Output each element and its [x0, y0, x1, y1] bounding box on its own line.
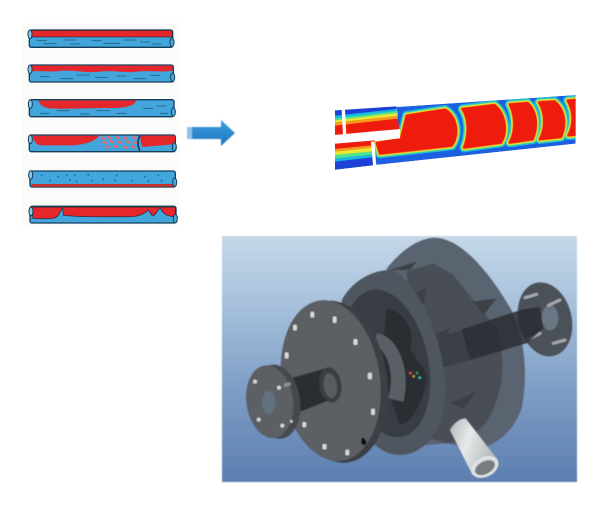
upper inlet bands	[335, 106, 400, 135]
main pipe with slugs	[373, 95, 583, 165]
lower inlet bands	[335, 140, 375, 170]
front plate	[271, 294, 391, 468]
white inlet gaps	[334, 129, 400, 144]
dark wedges	[390, 262, 497, 408]
ring inner cavity	[330, 281, 443, 445]
left flange rim	[248, 361, 305, 442]
pipe: bubbly flow	[29, 171, 177, 187]
panel: flow regime pipes	[23, 23, 179, 226]
flange bolts	[525, 294, 565, 343]
coloured sensors	[409, 372, 421, 379]
dark inner rear body	[407, 263, 502, 443]
pipe: wavy stratified flow	[28, 65, 175, 82]
black hole mark	[361, 438, 367, 446]
flange bore	[542, 305, 558, 330]
plate bolts	[284, 311, 375, 456]
pipe: plug flow	[28, 100, 175, 117]
light inner crescent	[375, 333, 406, 402]
large rear disk	[387, 238, 525, 449]
arrow: blue block arrow	[187, 120, 235, 146]
inlet pipe	[290, 367, 339, 412]
pipe: stratified flow	[28, 30, 174, 47]
front plate rim	[275, 294, 398, 470]
left flange face	[241, 362, 298, 441]
outlet pipe right	[433, 307, 543, 368]
pipe: slug flow	[28, 135, 176, 152]
flange bore	[262, 391, 275, 414]
internal window	[380, 308, 427, 425]
flange bolts	[253, 380, 293, 428]
steel nozzle	[450, 419, 497, 475]
inlet pipe mouth	[317, 366, 344, 404]
middle housing ring	[342, 270, 445, 455]
pipe: annular flow	[29, 206, 177, 223]
panel: 3D model of separator	[222, 236, 580, 482]
chart: CFD contour of slug flow in pipe	[334, 95, 583, 170]
right flange	[510, 276, 580, 362]
